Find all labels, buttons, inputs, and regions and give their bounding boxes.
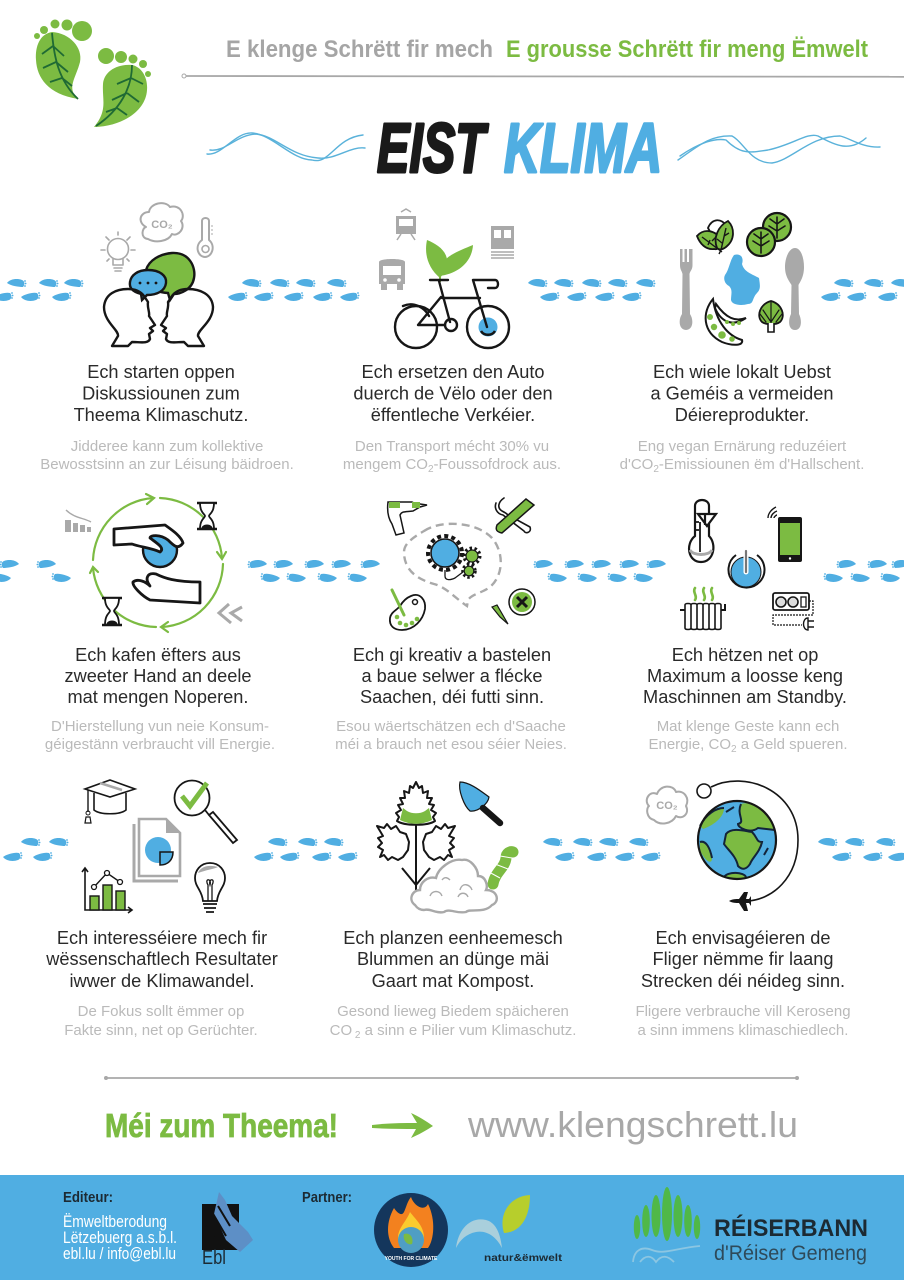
note: a sinn e Pilier vum Klimaschutz. — [360, 1022, 576, 1039]
editor: Ëmweltberodung — [63, 1212, 167, 1231]
heading: Maximum a loosse keng — [647, 666, 843, 686]
icon: green cycle arrows — [90, 494, 226, 632]
note: Energie, CO — [648, 736, 848, 755]
icon: magnifier with check — [174, 780, 237, 843]
wave right — [678, 135, 880, 163]
icon: Luxembourg map — [724, 255, 760, 305]
icon: leaves — [426, 240, 473, 282]
note: -Emissiounen ëm d'Hallschent. — [659, 456, 864, 473]
icon: thermometer — [198, 218, 213, 257]
website: www.klengschrett.lu — [467, 1104, 798, 1145]
icon: orbit with plane — [697, 781, 798, 911]
logo: Ebl — [202, 1192, 253, 1269]
footprints row 3 middle-left — [254, 838, 358, 861]
heading: Maschinnen am Standby. — [643, 687, 847, 707]
icon: bus — [379, 259, 405, 290]
note: D'Hierstellung vun neie Konsum- — [51, 718, 269, 735]
footer rule — [104, 1076, 799, 1080]
logo: Réiserbann spears — [634, 1187, 700, 1241]
tagline: E klenge Schrëtt fir mech — [226, 36, 493, 63]
heading: Ech wiele lokalt Uebst — [653, 362, 831, 382]
note: Esou wäertschätzen ech d'Saache — [336, 718, 566, 735]
icon: wifi signal — [768, 507, 777, 518]
icon: phone — [778, 517, 802, 562]
note: 2 — [653, 464, 659, 475]
note: Eng vegan Ernärung reduzéiert — [638, 438, 847, 455]
icon: train — [491, 226, 514, 258]
editor: Editeur: — [63, 1189, 113, 1206]
panel: planting — [330, 782, 576, 1041]
note: -Foussofdrock aus. — [434, 456, 561, 473]
panel: second hand — [45, 494, 275, 753]
heading: zweeter Hand an deele — [64, 666, 252, 686]
footprints row 3 left — [3, 838, 68, 861]
icon: upper hand — [114, 525, 183, 552]
note: Bewosstsinn an zur Léisung bäidroen. — [40, 456, 294, 473]
header rule — [182, 74, 904, 78]
icon: tram — [396, 209, 416, 240]
footprints row 2 middle-right — [534, 560, 666, 582]
heading: Déiereprodukter. — [675, 405, 809, 425]
note: Fligere verbrauche vill Keroseng — [635, 1003, 851, 1020]
icon: palette — [390, 590, 425, 630]
note: géigestänn verbraucht vill Energie. — [45, 736, 275, 753]
logo: Youth for Climate — [374, 1193, 448, 1267]
arrow — [372, 1113, 433, 1138]
note: 2 — [731, 744, 737, 755]
heading: Fliger nëmme fir laang — [653, 949, 833, 969]
icon: worm — [489, 852, 513, 884]
icon: lower hand — [133, 574, 200, 603]
icon: artichoke — [759, 301, 783, 332]
heading: Gaart mat Kompost. — [372, 971, 534, 991]
panel: creative — [335, 498, 567, 753]
heading: Ech ersetzen den Auto — [361, 362, 545, 382]
heading: a Geméis a vermeiden — [651, 384, 833, 404]
logo: natur&emwelt — [456, 1195, 563, 1264]
icon: bar chart — [82, 868, 132, 913]
icon: button — [509, 589, 535, 615]
note: Jidderee kann zum kollektive — [71, 438, 263, 455]
heading: Ech envisagéieren de — [656, 928, 830, 948]
editor: Lëtzebuerg a.s.b.l. — [63, 1228, 177, 1247]
heading: Strecken déi néideg sinn. — [641, 971, 845, 991]
note: Gesond lieweg Biedem späicheren — [337, 1003, 569, 1020]
note: 2 — [352, 1030, 361, 1041]
icon: soil cloud — [411, 860, 497, 912]
note: CO — [330, 1022, 576, 1041]
heading: Ech gi kreativ a bastelen — [353, 645, 551, 665]
icon: coin — [143, 533, 177, 567]
panel: discussion — [40, 203, 294, 473]
note: méi a brauch net esou séier Neies. — [335, 736, 567, 753]
icon: hourglass bottom — [102, 598, 122, 625]
heading: Ech planzen eenheemesch — [343, 928, 563, 948]
tagline — [226, 36, 868, 63]
icon: bulb — [195, 863, 225, 912]
icon: chevrons — [219, 604, 242, 623]
heading: a baue selwer a flécke — [362, 666, 542, 686]
icon: dashed thought bubble — [404, 524, 501, 606]
panel: energy — [643, 500, 848, 755]
heading: Ech interesséiere mech fir — [57, 928, 267, 948]
editor — [63, 1189, 177, 1263]
icon: gears — [428, 536, 480, 580]
footprints row 1 left — [0, 279, 84, 301]
note: d'CO — [620, 456, 864, 475]
icon: radiator — [680, 588, 725, 630]
icon: needle — [492, 605, 508, 624]
note: Mat klenge Geste kann ech — [657, 718, 839, 735]
logo: Youth for Climate: YOUTH FOR CLIMATE — [385, 1256, 438, 1262]
icon: fork — [680, 249, 692, 330]
panel: footer band — [0, 1175, 904, 1280]
logo: Réiserbann wordmark: d'Réiser Gemeng — [714, 1242, 867, 1265]
footprints row 1 right — [821, 279, 904, 301]
panel: flying — [635, 781, 851, 1039]
panel: bicycle — [343, 209, 561, 475]
panel: science — [45, 780, 278, 1039]
heading: duerch de Vëlo oder den — [353, 384, 553, 404]
footprints row 2 middle-left — [248, 560, 380, 582]
icon: CO2 cloud — [647, 787, 687, 823]
heading: Ech kafen ëfters aus — [75, 645, 241, 665]
icon: pea pods — [706, 299, 746, 345]
note: mengem CO — [343, 456, 561, 475]
icon: drill — [388, 502, 427, 535]
heading: Theema Klimaschutz. — [74, 405, 248, 425]
heading: ëffentleche Verkéier. — [371, 405, 535, 425]
icon: light bulb — [101, 232, 135, 271]
heading: Diskussiounen zum — [82, 384, 240, 404]
footprints row 1 middle-right — [528, 279, 656, 301]
heading: wëssenschaftlech Resultater — [45, 949, 278, 969]
heading: iwwer de Klimawandel. — [70, 971, 254, 991]
icon: power strip — [773, 593, 814, 630]
icon: globe — [698, 801, 776, 879]
icon: power button — [728, 551, 764, 588]
logo: natur&emwelt: natur&ëmwelt — [484, 1252, 563, 1264]
note: a sinn immens klimaschiedlech. — [638, 1022, 848, 1039]
footprints row 2 right — [824, 560, 904, 582]
tagline: E grousse Schrëtt fir meng Ëmwelt — [506, 36, 868, 63]
heading: mat mengen Noperen. — [68, 687, 248, 707]
editor: ebl.lu / info@ebl.lu — [63, 1244, 176, 1263]
icon: spinach — [697, 220, 733, 254]
note: Den Transport mécht 30% vu — [355, 438, 549, 455]
logo: leaf footprints — [34, 20, 151, 127]
note: a Geld spueren. — [737, 736, 848, 753]
panel: local food — [620, 213, 864, 475]
icon: talking heads — [104, 253, 213, 346]
partner label: Partner: — [302, 1189, 352, 1206]
note: Fakte sinn, net op Gerüchter. — [64, 1022, 258, 1039]
logo: Ebl: Ebl — [202, 1247, 226, 1269]
heading: Saachen, déi futti sinn. — [360, 687, 544, 707]
icon: brussels sprouts — [747, 213, 791, 256]
icon: CO2 cloud: CO₂ — [151, 219, 173, 231]
heading: Blummen an dünge mäi — [357, 949, 549, 969]
title: KLIMA — [504, 109, 662, 187]
logo: Réiserbann wave — [633, 1246, 700, 1262]
icon: CO2 cloud — [141, 203, 183, 241]
icon: trowel — [460, 782, 500, 823]
icon: plant — [377, 782, 455, 890]
note: 2 — [428, 464, 434, 475]
icon: falling chart — [65, 510, 91, 532]
footprints row 3 right — [818, 838, 904, 861]
icon: bicycle — [395, 280, 509, 348]
logo: Réiserbann wordmark: RÉISERBANN — [714, 1214, 868, 1242]
icon: graduation cap — [85, 780, 135, 823]
icon: crossed tools — [495, 498, 534, 533]
title: EIST — [377, 109, 489, 187]
footprints row 3 middle-right — [543, 838, 660, 861]
footprints row 1 middle-left — [228, 279, 360, 301]
icon: CO2 cloud: CO₂ — [656, 800, 678, 812]
icon: thermometer with arrow — [689, 500, 716, 562]
note: De Fokus sollt ëmmer op — [78, 1003, 244, 1020]
logo: Réiserbann wordmark — [714, 1214, 868, 1265]
icon: spoon — [785, 248, 804, 330]
footprints row 2 left — [0, 560, 71, 582]
icon: hourglass top — [197, 503, 217, 529]
wave left — [207, 133, 365, 161]
title — [377, 109, 662, 187]
icon: document with pie chart — [134, 819, 180, 881]
call to action: Méi zum Theema! — [105, 1107, 338, 1144]
heading: Ech starten oppen — [87, 362, 235, 382]
heading: Ech hëtzen net op — [672, 645, 818, 665]
